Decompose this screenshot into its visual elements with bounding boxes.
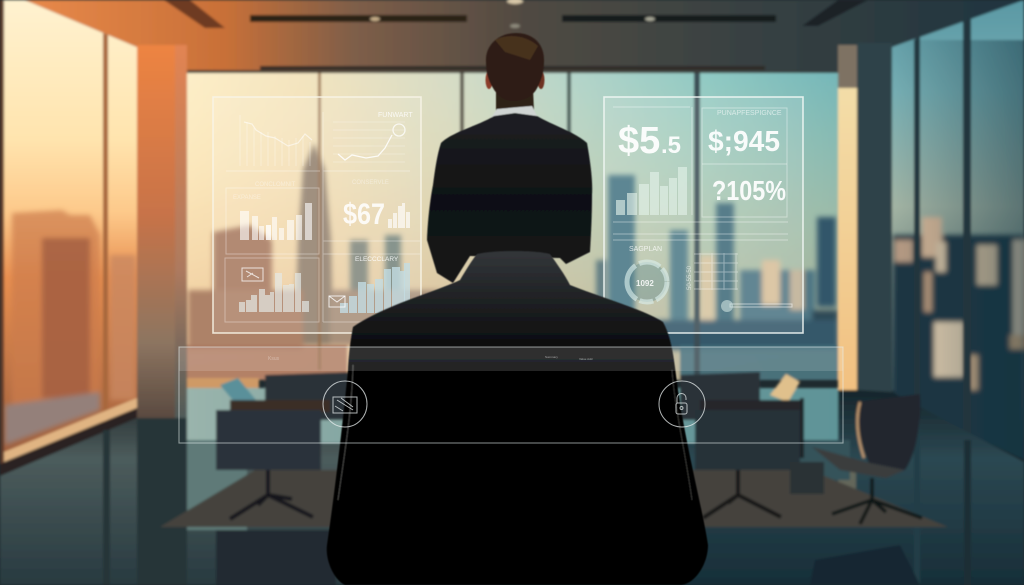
dashboard: right glass panel <box>604 97 803 333</box>
ears <box>486 71 492 89</box>
metric: $5.5: $5 <box>618 120 660 162</box>
rug <box>160 470 948 527</box>
donut gauge: SAGPLAN <box>629 246 662 253</box>
jacket <box>427 113 592 283</box>
blurred skyline <box>188 143 838 350</box>
pillars <box>137 43 892 420</box>
bar chart: revenue <box>616 167 687 215</box>
metric: $;945 <box>708 110 782 158</box>
line chart: upper right: FUNWART <box>378 112 413 119</box>
dashboard: left glass panel <box>213 97 421 333</box>
mini grid chart <box>687 253 738 290</box>
left window wall <box>0 0 137 476</box>
neck <box>496 88 534 112</box>
mini grid chart: 50-55-50 <box>687 265 693 290</box>
bar chart: middle left: EXPANSE <box>233 195 261 201</box>
donut gauge <box>627 246 667 302</box>
lower sill band <box>187 345 347 380</box>
line chart: upper right <box>333 112 413 162</box>
sills and bright floor behind lounge <box>187 378 259 388</box>
bar chart: bottom right: ELECCCLARY <box>355 256 399 263</box>
icon: padlock in circle <box>659 381 705 427</box>
line chart: upper left <box>240 115 312 166</box>
head and hair <box>486 33 544 101</box>
bar chart: middle left <box>233 182 312 240</box>
man standing: back view <box>427 33 592 283</box>
floor <box>0 378 1024 585</box>
value tile: $67: CONSERVLE <box>352 180 389 186</box>
value tile: $67 <box>343 180 410 231</box>
window mullions <box>318 70 321 370</box>
left office furniture <box>216 372 350 519</box>
floor reflection <box>216 530 336 585</box>
lower glass control strip: Ksus <box>268 356 280 362</box>
right swivel chair <box>812 394 922 524</box>
bar chart: bottom left <box>239 268 309 312</box>
ceiling <box>25 0 1024 72</box>
value tile: $67: $67 <box>343 198 385 231</box>
metric: $5.5 <box>618 120 681 162</box>
pillar and mullion reflections <box>137 418 187 585</box>
metric: $;945: PUNAPFESPIGNCE <box>717 110 782 117</box>
donut gauge: 1092 <box>636 279 654 288</box>
right office furniture <box>680 372 824 518</box>
bar chart: bottom right <box>329 256 410 313</box>
metric: ?105%: ?105% <box>712 175 786 206</box>
icon: card in circle <box>323 381 367 427</box>
foreground silhouette: seated figure <box>327 251 708 585</box>
metric: $5.5: .5 <box>661 132 681 159</box>
lower glass control strip: Value Add <box>579 357 593 361</box>
lower glass control strip <box>179 347 843 443</box>
right window wall <box>892 0 1024 470</box>
bar chart: middle left: CONCLOMNIT <box>255 182 296 188</box>
lower glass control strip: Summary <box>545 355 558 359</box>
collar <box>491 106 538 118</box>
metric: $;945: $;945 <box>708 126 780 158</box>
central panorama windows <box>187 68 838 380</box>
slider control <box>721 300 792 312</box>
